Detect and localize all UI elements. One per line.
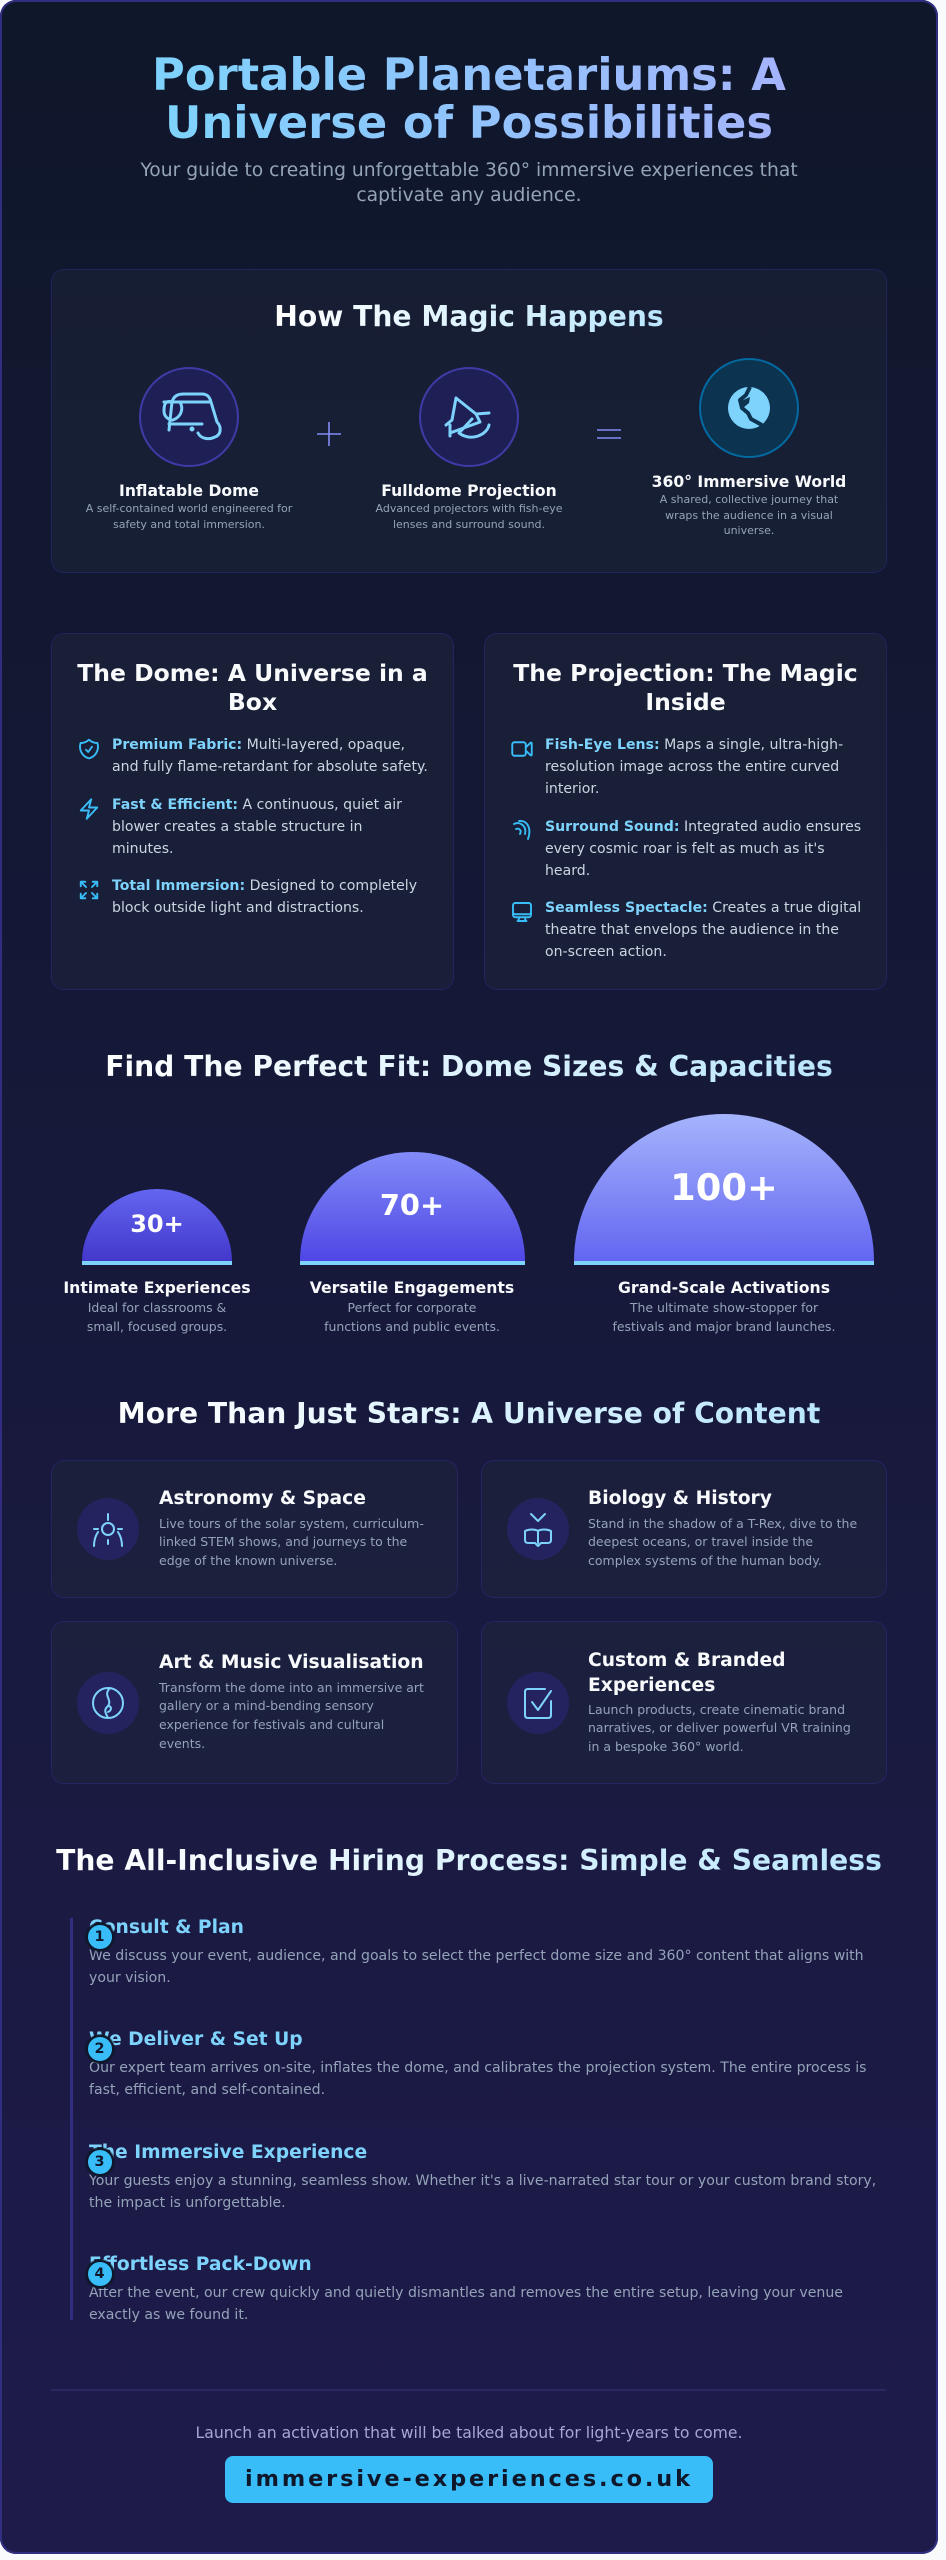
- heading: content: More Than Just Stars: A Universe of Content: [118, 1397, 820, 1430]
- bullet: surround sound: heard.: [545, 863, 590, 879]
- title: Portable Planetariums: A: [152, 48, 786, 101]
- title: biology: Biology & History: [588, 1488, 772, 1509]
- dome: 30+: 30+: [130, 1210, 184, 1238]
- panel: the dome: [52, 634, 453, 989]
- card: biology: [482, 1461, 886, 1597]
- icon: biology: [507, 1498, 569, 1560]
- step 3: Your guests enjoy a stunning, seamless show. Whether it's a live-narrated star tour or your custom brand story,: [89, 2173, 876, 2189]
- text: custom: Launch products, create cinematic brand: [588, 1702, 845, 1717]
- icon: globe: [699, 358, 799, 458]
- step 4: [85, 2254, 843, 2323]
- size: 30+: Intimate Experiences: [63, 1278, 251, 1297]
- bullet: total immersion: block outside light and distractions.: [112, 900, 364, 916]
- step 3: The Immersive Experience: [89, 2142, 367, 2163]
- subtitle: captivate any audience.: [356, 185, 582, 206]
- subtitle: [140, 160, 798, 206]
- step 4: 4: [94, 2266, 104, 2282]
- size: 70+: Versatile Engagements: [310, 1278, 514, 1297]
- bullet: total immersion: [80, 878, 417, 916]
- website button: [225, 2456, 713, 2503]
- title: art: Art & Music Visualisation: [159, 1652, 424, 1673]
- step 4: Effortless Pack-Down: [89, 2254, 312, 2275]
- step 4: exactly as we found it.: [89, 2307, 248, 2323]
- step 1: We discuss your event, audience, and goals to select the perfect dome size and 360° content that aligns with: [89, 1948, 864, 1964]
- dome: 70+: 70+: [380, 1188, 444, 1222]
- dome: 100+: 100+: [670, 1166, 778, 1209]
- size: 70+: functions and public events.: [324, 1319, 500, 1334]
- bullet: premium fabric: Premium Fabric: Multi-layered, opaque,: [112, 737, 405, 753]
- heading: the projection: [513, 659, 858, 716]
- title: custom: Custom & Branded: [588, 1650, 786, 1670]
- text: custom: in a bespoke 360° world.: [588, 1739, 744, 1754]
- size: 30+: Ideal for classrooms &: [88, 1300, 226, 1315]
- size: 100+: festivals and major brand launches.: [613, 1319, 835, 1334]
- step 3: [85, 2142, 876, 2211]
- bullet: seamless spectacle: Seamless Spectacle: Creates a true digital: [545, 900, 861, 916]
- step: inflatable dome: [86, 367, 292, 531]
- bullet: fast and efficient: blower creates a stable structure in: [112, 819, 362, 835]
- step: immersive world: [652, 358, 846, 537]
- subtitle: Your guide to creating unforgettable 360° immersive experiences that: [140, 160, 798, 181]
- bullet: total immersion: Total Immersion: Designed to completely: [112, 878, 417, 894]
- size: 30+: [63, 1189, 251, 1334]
- step 2: 2: [94, 2041, 104, 2057]
- size: 100+: [574, 1114, 874, 1334]
- card: astronomy: [52, 1461, 457, 1597]
- step 2: [85, 2029, 866, 2098]
- size: 70+: [300, 1152, 525, 1334]
- text: astronomy: linked STEM shows, and journeys to the: [159, 1534, 407, 1549]
- bullet: surround sound: [513, 819, 861, 879]
- bullet: premium fabric: [79, 737, 428, 775]
- text: art: Transform the dome into an immersive art: [159, 1680, 424, 1695]
- step 2: Our expert team arrives on-site, inflates the dome, and calibrates the projection system. The entire process is: [89, 2060, 866, 2076]
- bullet: seamless spectacle: [512, 900, 861, 960]
- bullet: fast and efficient: Fast & Efficient: A continuous, quiet air: [112, 797, 402, 813]
- step: immersive world: universe.: [724, 524, 774, 537]
- bullet: surround sound: Surround Sound: Integrated audio ensures: [545, 819, 861, 835]
- bullet: fish-eye lens: Fish-Eye Lens: Maps a single, ultra-high-: [545, 737, 843, 753]
- panel: the projection: [485, 634, 886, 989]
- step 1: your vision.: [89, 1970, 171, 1986]
- text: biology: Stand in the shadow of a T-Rex, dive to the: [588, 1516, 857, 1531]
- step: fulldome projection: Fulldome Projection: [381, 482, 557, 500]
- dome: 30+: [82, 1189, 232, 1265]
- heading: hiring process: The All-Inclusive Hiring Process: Simple & Seamless: [56, 1844, 882, 1877]
- icon: custom: [507, 1672, 569, 1734]
- timeline: hiring process: [70, 1917, 876, 2323]
- text: astronomy: edge of the known universe.: [159, 1553, 337, 1568]
- bullet: fish-eye lens: resolution image across the entire curved: [545, 759, 839, 775]
- bullet: premium fabric: and fully flame-retardant for absolute safety.: [112, 759, 428, 775]
- icon: astronomy: [77, 1498, 139, 1560]
- heading: the dome: The Dome: A Universe in a: [77, 659, 428, 687]
- heading: dome sizes: Find The Perfect Fit: Dome Sizes & Capacities: [105, 1050, 833, 1083]
- step: fulldome projection: [376, 367, 562, 531]
- panel: how the magic happens: [52, 270, 886, 572]
- bullet: fast and efficient: [80, 797, 402, 857]
- step: immersive world: wraps the audience in a visual: [665, 509, 833, 522]
- heading: how the magic happens: How The Magic Happens: [274, 300, 664, 333]
- card: art and music: [52, 1622, 457, 1783]
- dome: 70+: [300, 1152, 524, 1265]
- heading: the projection: The Projection: The Magic: [513, 659, 858, 687]
- step 1: 1: [94, 1929, 104, 1945]
- size: 100+: Grand-Scale Activations: [618, 1278, 830, 1297]
- step 4: After the event, our crew quickly and quietly dismantles and removes the entire setup, leaving your venue: [89, 2285, 843, 2301]
- size: 70+: Perfect for corporate: [348, 1300, 476, 1315]
- timeline line: [70, 1918, 73, 2320]
- step 1: [85, 1917, 864, 1986]
- step 1: Consult & Plan: [89, 1917, 244, 1938]
- step 3: the impact is unforgettable.: [89, 2195, 286, 2211]
- text: art: events.: [159, 1736, 205, 1751]
- size: 100+: The ultimate show-stopper for: [630, 1300, 818, 1315]
- icon: fulldome projection: [419, 367, 519, 467]
- equals sign: [597, 429, 621, 439]
- heading: the dome: [77, 659, 428, 716]
- text: custom: [588, 1702, 851, 1754]
- title: astronomy: Astronomy & Space: [159, 1488, 366, 1509]
- step 3: 3: [94, 2154, 104, 2170]
- text: art: experience for festivals and cultural: [159, 1717, 384, 1732]
- title: [152, 48, 786, 148]
- heading: the projection: Inside: [645, 688, 726, 716]
- bullet: seamless spectacle: on-screen action.: [545, 944, 667, 960]
- bullet: fish-eye lens: interior.: [545, 781, 599, 797]
- footer text: Launch an activation that will be talked about for light-years to come.: [196, 2423, 742, 2442]
- dome: 100+: [574, 1114, 874, 1265]
- heading: the dome: Box: [228, 688, 277, 716]
- bullet: fish-eye lens: [511, 737, 843, 797]
- text: biology: [588, 1516, 857, 1568]
- text: biology: deepest oceans, or travel inside the: [588, 1534, 813, 1549]
- plus sign: [317, 422, 341, 446]
- icon: art: [77, 1672, 139, 1734]
- text: art: [158, 1680, 424, 1751]
- step 2: fast, efficient, and self-contained.: [89, 2082, 325, 2098]
- card: custom and branded: [482, 1622, 886, 1783]
- bullet: surround sound: every cosmic roar is felt as much as it's: [545, 841, 825, 857]
- step: fulldome projection: Advanced projectors with fish-eye: [376, 502, 562, 515]
- step 2: We Deliver & Set Up: [89, 2029, 303, 2050]
- title: custom: Experiences: [588, 1674, 715, 1696]
- icon: inflatable dome: [139, 367, 239, 467]
- bullet: seamless spectacle: theatre that envelops the audience in the: [545, 922, 839, 938]
- text: custom: narratives, or deliver powerful VR training: [588, 1720, 851, 1735]
- text: art: gallery or a mind-bending sensory: [159, 1698, 374, 1713]
- text: biology: complex systems of the human body.: [588, 1553, 822, 1568]
- step: inflatable dome: A self-contained world engineered for: [86, 502, 292, 515]
- size: 30+: small, focused groups.: [87, 1319, 227, 1334]
- step: immersive world: 360° Immersive World: [652, 473, 846, 491]
- title: Universe of Possibilities: [165, 96, 773, 148]
- step: immersive world: A shared, collective journey that: [660, 493, 838, 506]
- text: astronomy: [159, 1516, 424, 1568]
- step: fulldome projection: lenses and surround sound.: [393, 518, 545, 531]
- text: astronomy: Live tours of the solar system, curriculum-: [159, 1516, 424, 1531]
- website button: immersive-experiences.co.uk: [245, 2466, 693, 2492]
- bullet: fast and efficient: minutes.: [112, 841, 174, 857]
- step: inflatable dome: Inflatable Dome: [119, 482, 259, 500]
- title: custom: [588, 1650, 786, 1696]
- step: inflatable dome: safety and total immersion.: [113, 518, 265, 531]
